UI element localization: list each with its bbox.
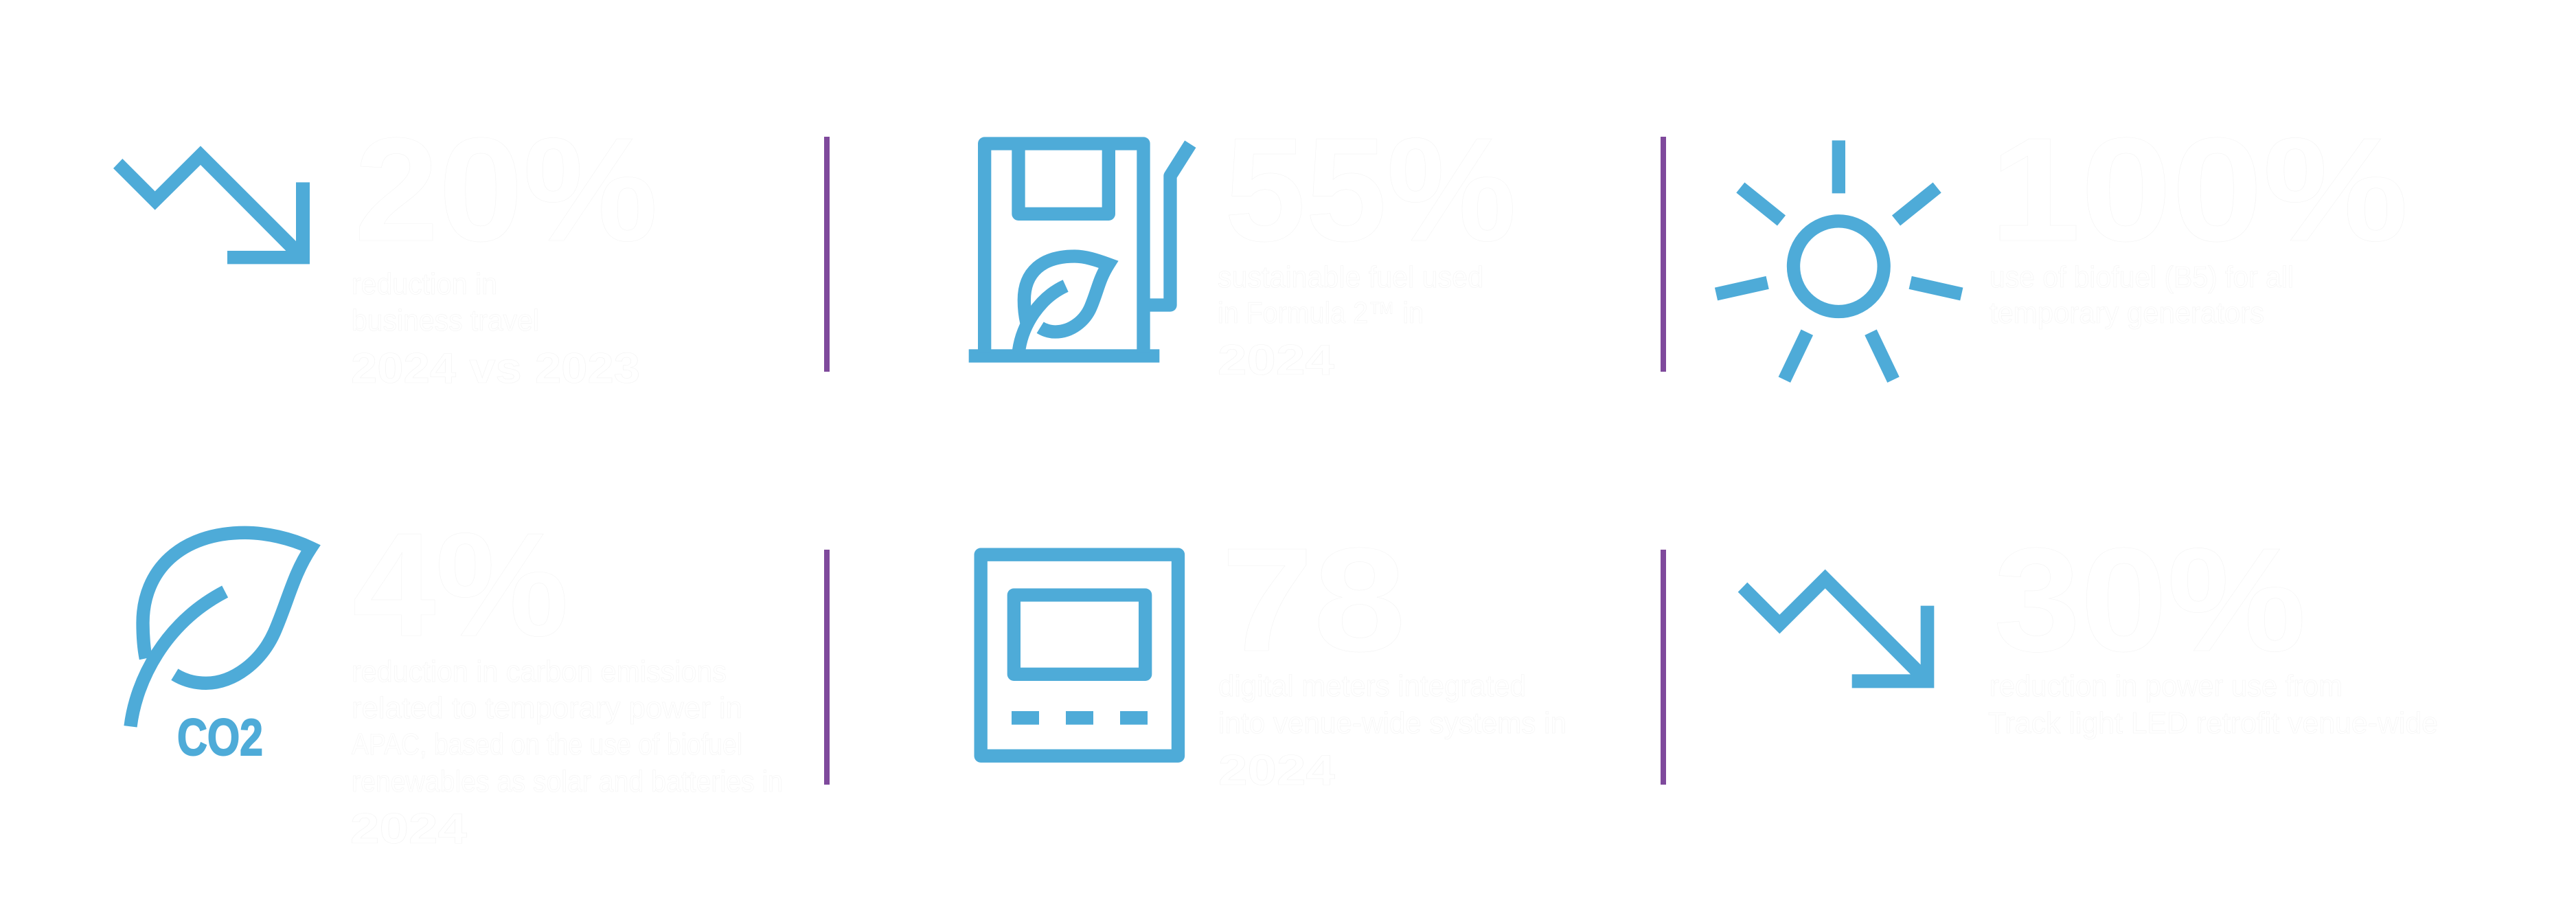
statistic: 30%: 30%: [1994, 517, 2306, 682]
description: digital meters: digital meters integrated: [1218, 669, 1526, 703]
description: carbon emissions: reduction in carbon emissions: [352, 655, 727, 688]
description: biofuel generators: [1990, 260, 2294, 330]
description: biofuel generators: use of biofuel (B5) for all: [1990, 260, 2294, 294]
description: track lighting: [1988, 669, 2438, 740]
description: carbon emissions: renewables as solar and batteries in: [352, 765, 783, 798]
divider: [1661, 550, 1666, 785]
description: track lighting: reduction in power use from: [1990, 669, 2343, 703]
statistic: 78: 78: [1221, 517, 1406, 682]
panel: track lighting: [1738, 517, 2438, 740]
description: digital meters: 2024: [1218, 747, 1336, 794]
icon: sun: [1716, 140, 1961, 380]
description: business travel: reduction in: [352, 267, 497, 301]
panel: carbon emissions: [130, 502, 783, 853]
description: business travel: [351, 267, 640, 392]
panel: biofuel generators: [1716, 106, 2408, 380]
panel: business travel: [113, 106, 658, 392]
statistic: 100%: 100%: [1990, 106, 2408, 272]
description: carbon emissions: related to temporary power in: [352, 691, 742, 725]
description: track lighting: Track light LED retrofit venue-wide: [1988, 706, 2438, 740]
description: biofuel generators: temporary generators: [1990, 296, 2264, 330]
description: sustainable fuel: in Formula 2™ in: [1218, 296, 1424, 330]
description: carbon emissions: APAC, based on the use of biofuel: [352, 728, 742, 761]
icon: fuel pump with leaf: [969, 144, 1190, 363]
description: sustainable fuel: sustainable fuel used: [1218, 260, 1483, 294]
statistic: 55%: 55%: [1224, 106, 1516, 272]
icon: downward trend arrow: [1738, 570, 1934, 688]
statistic: 4%: 4%: [352, 502, 569, 667]
icon: CO2 leaf: CO2: [177, 708, 263, 766]
statistic: 20%: 20%: [354, 106, 658, 272]
description: business travel: business travel: [352, 304, 539, 337]
description: business travel: 2024 vs 2023: [351, 345, 640, 392]
icon: downward trend arrow: [113, 146, 310, 264]
description: digital meters: into venue-wide systems in: [1218, 706, 1566, 740]
divider: [824, 137, 830, 372]
description: sustainable fuel: 2024: [1218, 337, 1335, 384]
divider: [1661, 137, 1666, 372]
description: sustainable fuel: [1218, 260, 1483, 384]
icon: CO2 leaf: [130, 532, 311, 766]
panel: digital meters: [981, 517, 1566, 794]
description: carbon emissions: [350, 655, 783, 853]
description: carbon emissions: 2024: [350, 805, 468, 853]
divider: [824, 550, 830, 785]
description: digital meters: [1218, 669, 1566, 794]
panel: sustainable fuel: [969, 106, 1516, 384]
icon: digital meter: [981, 554, 1178, 756]
